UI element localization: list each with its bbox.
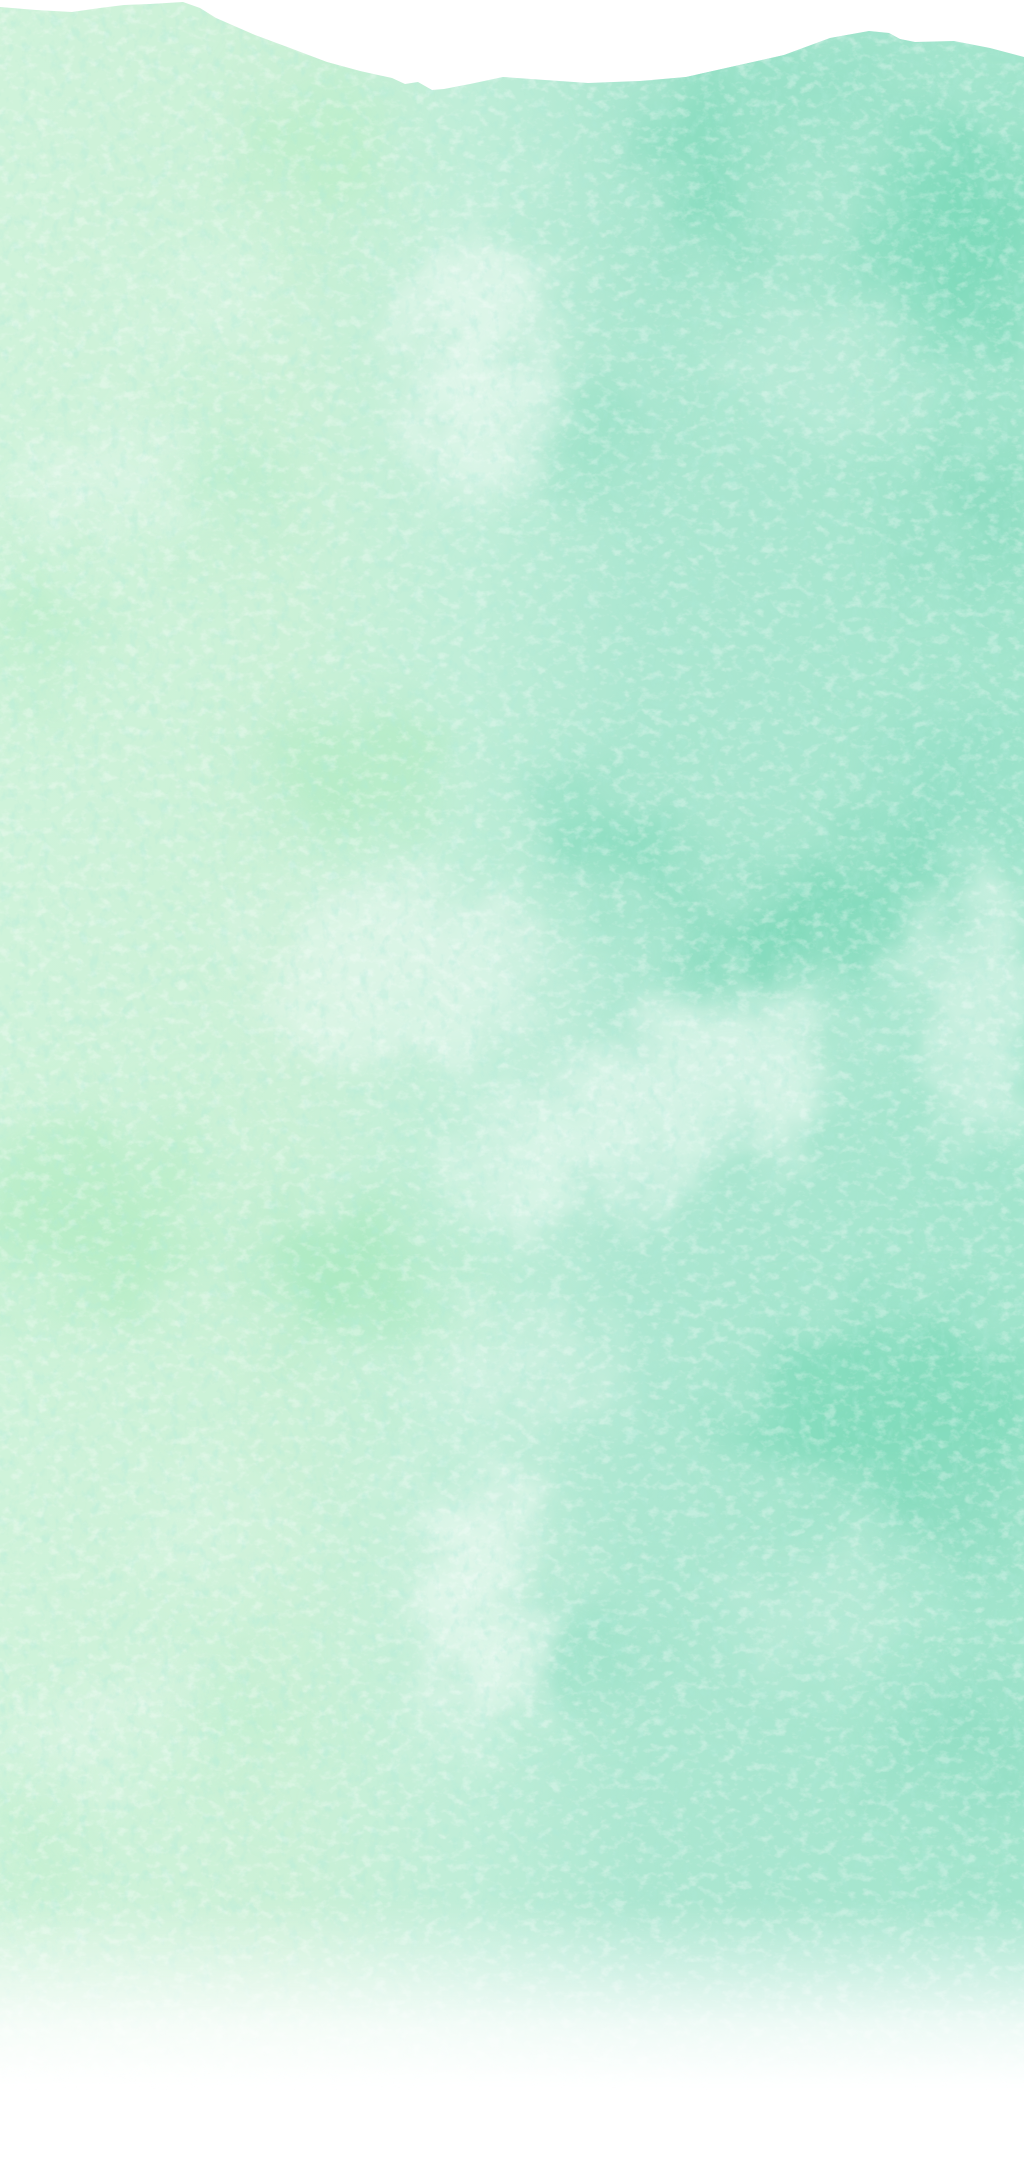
- bottom fade to white: [0, 1900, 1024, 2090]
- pale highlights: [0, 214, 1024, 1807]
